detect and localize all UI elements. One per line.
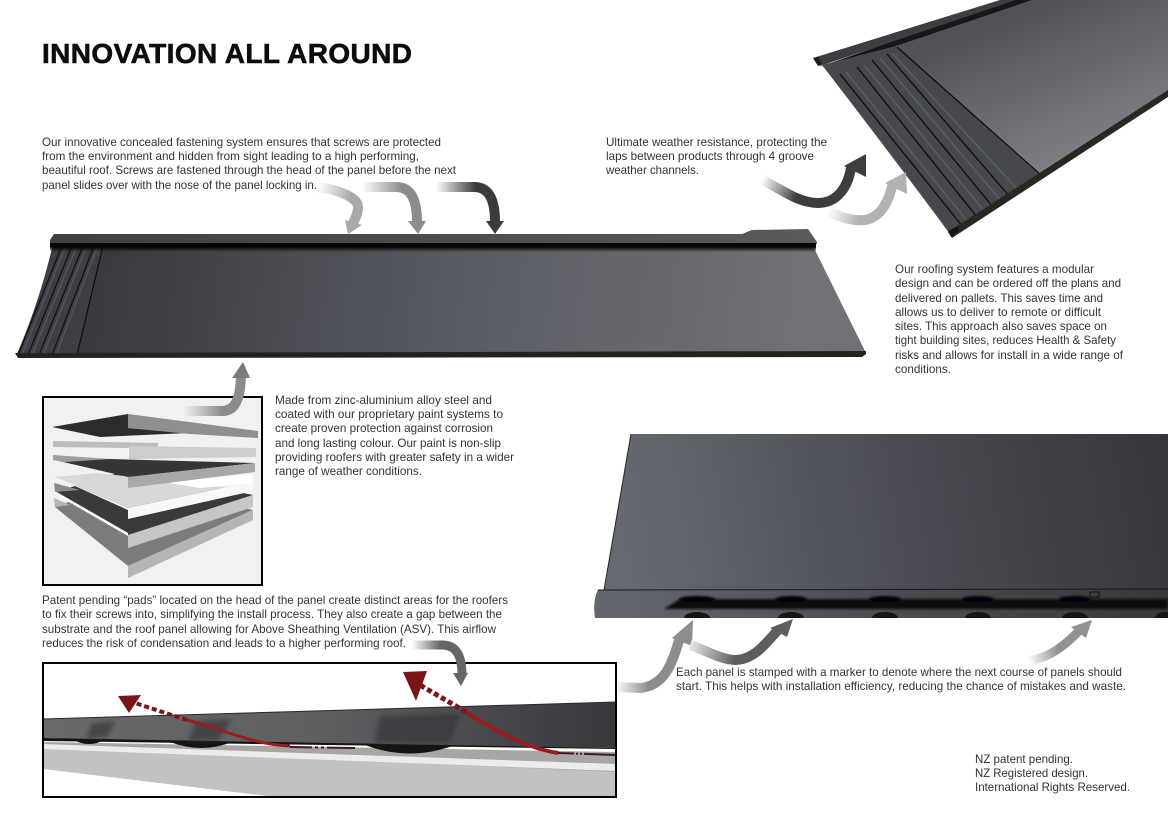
text: modular design (895, 263, 1124, 376)
text: stamped marker: start. This helps with installation efficiency, reducing the chance of mistakes and waste. (676, 680, 1126, 693)
image box: material layers (43, 397, 262, 585)
text: patent notice: NZ patent pending. (975, 753, 1073, 766)
text: weather resistance: Ultimate weather resistance, protecting the (606, 136, 827, 149)
layer: second light sheet (53, 441, 256, 459)
arrow: pad two (690, 619, 793, 660)
text: modular design: tight building sites, reduces Health & Safety (895, 334, 1116, 347)
text: modular design: risks and allows for install in a wide range of (895, 349, 1124, 362)
arrow: pads text to box (412, 645, 468, 686)
text: stamped marker (676, 666, 1126, 693)
text: modular design: delivered on pallets. This saves time and (895, 292, 1103, 305)
layer: third dark sheet (53, 455, 255, 488)
pads: dark underside (43, 738, 616, 754)
text: concealed fastening system: from the environment and hidden from sight leading to a high performing, (42, 150, 419, 163)
text: zinc-aluminium alloy steel: range of weather conditions. (275, 465, 422, 478)
text: modular design: Our roofing system features a modular (895, 263, 1094, 276)
text: weather resistance: laps between products through 4 groove (606, 150, 814, 163)
arrow: dark to weather channels (763, 154, 866, 203)
text: patent notice (975, 753, 1130, 794)
layer: bottom grey sheet (54, 480, 253, 578)
text: concealed fastening system: Our innovative concealed fastening system ensures that screws are protected (42, 136, 441, 149)
panel: bottom right roof panel (594, 434, 1168, 618)
text: patent notice: International Rights Reserved. (975, 781, 1130, 794)
panel: main roof panel (15, 229, 866, 358)
text: weather resistance: weather channels. (605, 164, 699, 177)
white mask: pad lower edge (590, 618, 1168, 628)
panel: top right roof panel (813, 0, 1168, 238)
text: concealed fastening system: panel slides over with the nose of the panel locking in. (42, 179, 317, 192)
arrow: panel marker (1028, 620, 1092, 661)
text: patent pending pads: reduces the risk of condensation and leads to a higher performing roof. (42, 637, 406, 650)
text: weather resistance (605, 136, 827, 177)
text: patent notice: NZ Registered design. (975, 767, 1088, 780)
image box: ventilation airflow (43, 663, 616, 797)
arrow: light to weather channels (829, 172, 907, 220)
text: zinc-aluminium alloy steel: coated with our proprietary paint systems to (275, 408, 503, 421)
arrow: layers to panel (184, 362, 250, 411)
arrow: red airflow left (118, 695, 355, 748)
title: INNOVATION ALL AROUND (42, 38, 412, 69)
text: modular design: design and can be ordered off the plans and (895, 277, 1121, 290)
pads: shaded facets (86, 714, 460, 743)
icon: panel marker (1090, 592, 1099, 597)
arrow: dark to third screw (436, 187, 504, 234)
layer: top dark sheet (52, 414, 258, 438)
text: zinc-aluminium alloy steel: providing roofers with greater safety in a wider (275, 451, 514, 464)
layer: fifth dark sheet (54, 470, 253, 548)
pads: panel head pads (684, 612, 1168, 624)
text: modular design: sites. This approach also saves space on (895, 320, 1107, 333)
layer: white sheet (55, 473, 253, 519)
text: stamped marker: Each panel is stamped with a marker to denote where the next course of panels should (676, 666, 1122, 679)
text: zinc-aluminium alloy steel: and long lasting colour. Our paint is non-slip (275, 437, 501, 450)
text: modular design: conditions. (895, 363, 951, 376)
text: patent pending pads: Patent pending “pads” located on the head of the panel create distinct areas for the roofers (42, 594, 508, 607)
text: modular design: allows us to deliver to remote or difficult (895, 306, 1102, 319)
text: concealed fastening system (42, 136, 457, 192)
text: patent pending pads: substrate and the roof panel allowing for Above Sheathing Ventilation (ASV). This airflow (42, 623, 497, 636)
text: patent pending pads (42, 594, 508, 650)
arrow: light grey to first screw (318, 187, 362, 234)
arrow: pad one (615, 620, 693, 688)
text: concealed fastening system: beautiful roof. Screws are fastened through the head of the panel before the next (42, 164, 457, 177)
arrow: red airflow right (403, 671, 616, 755)
arrow: mid grey to second screw (362, 187, 426, 234)
text: zinc-aluminium alloy steel: Made from zinc-aluminium alloy steel and (275, 394, 492, 407)
text: patent pending pads: to fix their screws into, simplifying the install process. They also create a gap between the (42, 608, 502, 621)
text: zinc-aluminium alloy steel (275, 394, 514, 478)
text: zinc-aluminium alloy steel: create proven protection against corrosion (275, 422, 493, 435)
